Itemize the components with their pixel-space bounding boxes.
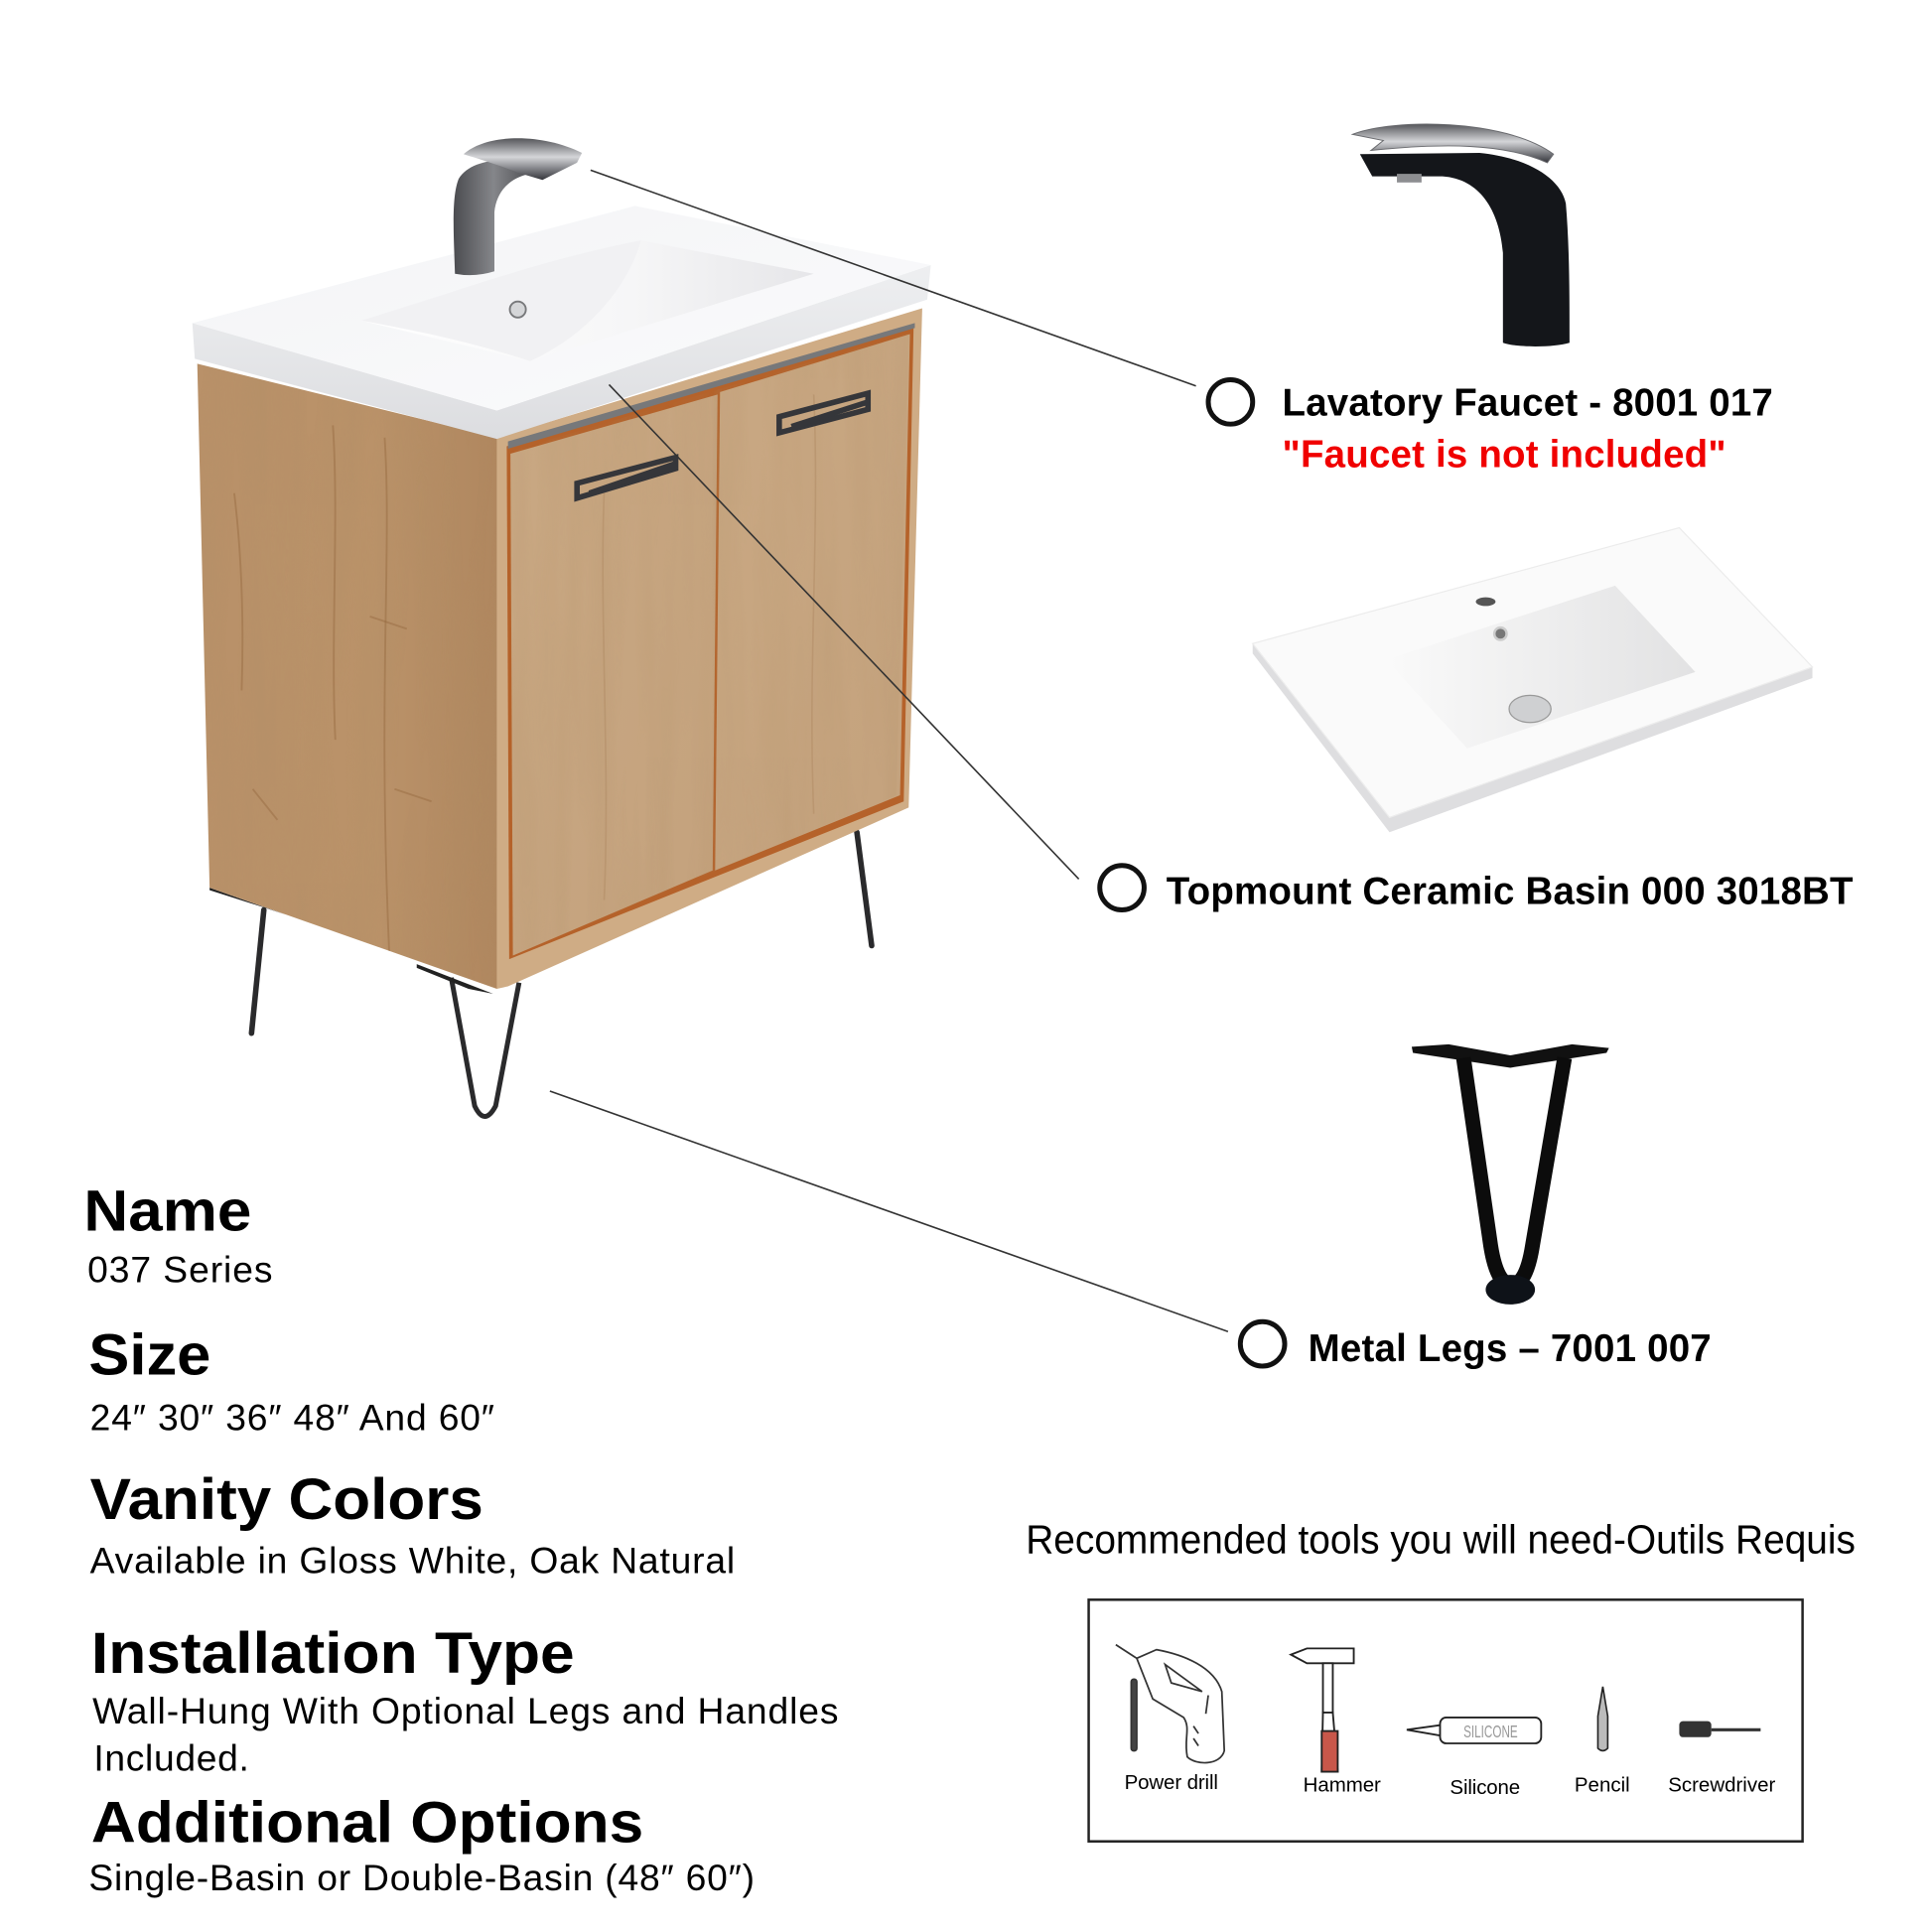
product photo: faucet xyxy=(1352,124,1570,346)
icon: pencil xyxy=(1597,1687,1607,1750)
icon: screwdriver xyxy=(1679,1722,1760,1737)
cabinet front frame xyxy=(496,308,922,989)
leg mount plates xyxy=(209,888,493,994)
label: screwdriver: Screwdriver xyxy=(1668,1773,1775,1796)
counter edge xyxy=(193,265,931,439)
spec list xyxy=(83,1178,838,1898)
warning note: "Faucet is not included" xyxy=(1283,434,1726,477)
heading: additional options: Additional Options xyxy=(91,1790,643,1855)
icon: silicone tube xyxy=(1407,1718,1541,1743)
heading: vanity colors: Vanity Colors xyxy=(90,1467,483,1532)
size value: 24″ 30″ 36″ 48″ And 60″ xyxy=(90,1397,494,1439)
product photo: metal leg xyxy=(1412,1044,1609,1305)
marker ring xyxy=(1208,379,1253,424)
marker ring xyxy=(1100,866,1144,909)
icon: silicone tube: SILICONE xyxy=(1463,1722,1518,1741)
callout: faucet xyxy=(1208,379,1773,477)
leader line: basin xyxy=(609,384,1079,879)
callout: legs xyxy=(1240,1321,1712,1370)
label: Topmount Ceramic Basin 000 3018BT xyxy=(1167,870,1854,912)
icon: hammer xyxy=(1291,1648,1354,1772)
counter top xyxy=(193,206,931,411)
door handle left xyxy=(577,458,676,498)
heading: installation type: Installation Type xyxy=(91,1621,575,1686)
label: Lavatory Faucet - 8001 017 xyxy=(1283,382,1773,425)
door handle right xyxy=(779,393,868,433)
tools heading: Recommended tools you will need-Outils Requis xyxy=(1026,1517,1856,1563)
label: Metal Legs – 7001 007 xyxy=(1309,1327,1712,1370)
rear right leg xyxy=(857,832,872,946)
tools panel xyxy=(1089,1599,1803,1842)
shadow rail under counter xyxy=(508,323,914,449)
callout: basin xyxy=(1100,866,1854,912)
drain xyxy=(510,302,526,318)
name value: 037 Series xyxy=(87,1249,272,1291)
heading: size: Size xyxy=(88,1323,210,1388)
cabinet side panel xyxy=(191,357,499,993)
installation value: Wall-Hung With Optional Legs and Handles xyxy=(92,1690,838,1731)
leader line: legs xyxy=(550,1091,1228,1331)
door left xyxy=(505,388,721,962)
faucet xyxy=(454,138,582,275)
heading: name: Name xyxy=(83,1178,251,1243)
options value: Single-Basin or Double-Basin (48″ 60″) xyxy=(88,1857,755,1898)
label: silicone: Silicone xyxy=(1449,1776,1520,1799)
colors value: Available in Gloss White, Oak Natural xyxy=(90,1540,735,1582)
label: pencil: Pencil xyxy=(1575,1773,1630,1796)
installation value: Included. xyxy=(93,1736,249,1778)
label: power drill: Power drill xyxy=(1125,1771,1218,1794)
installation value xyxy=(92,1690,838,1778)
vanity cabinet illustration xyxy=(191,138,931,1117)
label: hammer: Hammer xyxy=(1304,1773,1381,1796)
rear left leg xyxy=(251,909,264,1034)
leader line: faucet xyxy=(591,170,1196,386)
icon: power drill xyxy=(1116,1645,1224,1763)
marker ring xyxy=(1240,1321,1285,1366)
product photo: ceramic basin xyxy=(1253,528,1813,832)
front hairpin leg xyxy=(452,978,519,1117)
door right xyxy=(713,333,909,876)
basin bowl xyxy=(361,240,814,361)
